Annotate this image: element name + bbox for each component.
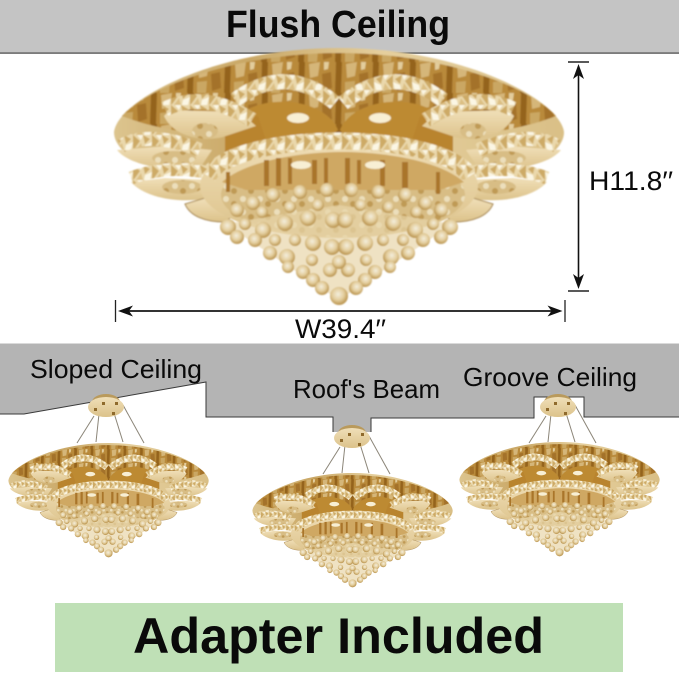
green banner xyxy=(55,603,623,672)
width label: W39.4′′ xyxy=(295,314,386,344)
height label: H11.8′′ xyxy=(589,166,673,196)
height dimension arrow xyxy=(568,62,589,291)
roof beam chandelier xyxy=(252,425,453,587)
main flush-mounted chandelier xyxy=(114,48,564,305)
label: Groove Ceiling: Groove Ceiling xyxy=(463,362,637,392)
sloped ceiling chandelier xyxy=(8,394,209,557)
flush ceiling band xyxy=(0,0,679,54)
width dimension arrow xyxy=(116,300,565,322)
ceiling profile: sloped, beam and groove xyxy=(0,344,679,432)
label: Sloped Ceiling: Sloped Ceiling xyxy=(30,354,202,384)
title: Flush Ceiling: Flush Ceiling xyxy=(226,4,450,46)
label: Roof's Beam: Roof's Beam xyxy=(293,374,440,404)
banner text: Adapter Included: Adapter Included xyxy=(133,608,544,664)
groove ceiling chandelier xyxy=(459,394,660,556)
